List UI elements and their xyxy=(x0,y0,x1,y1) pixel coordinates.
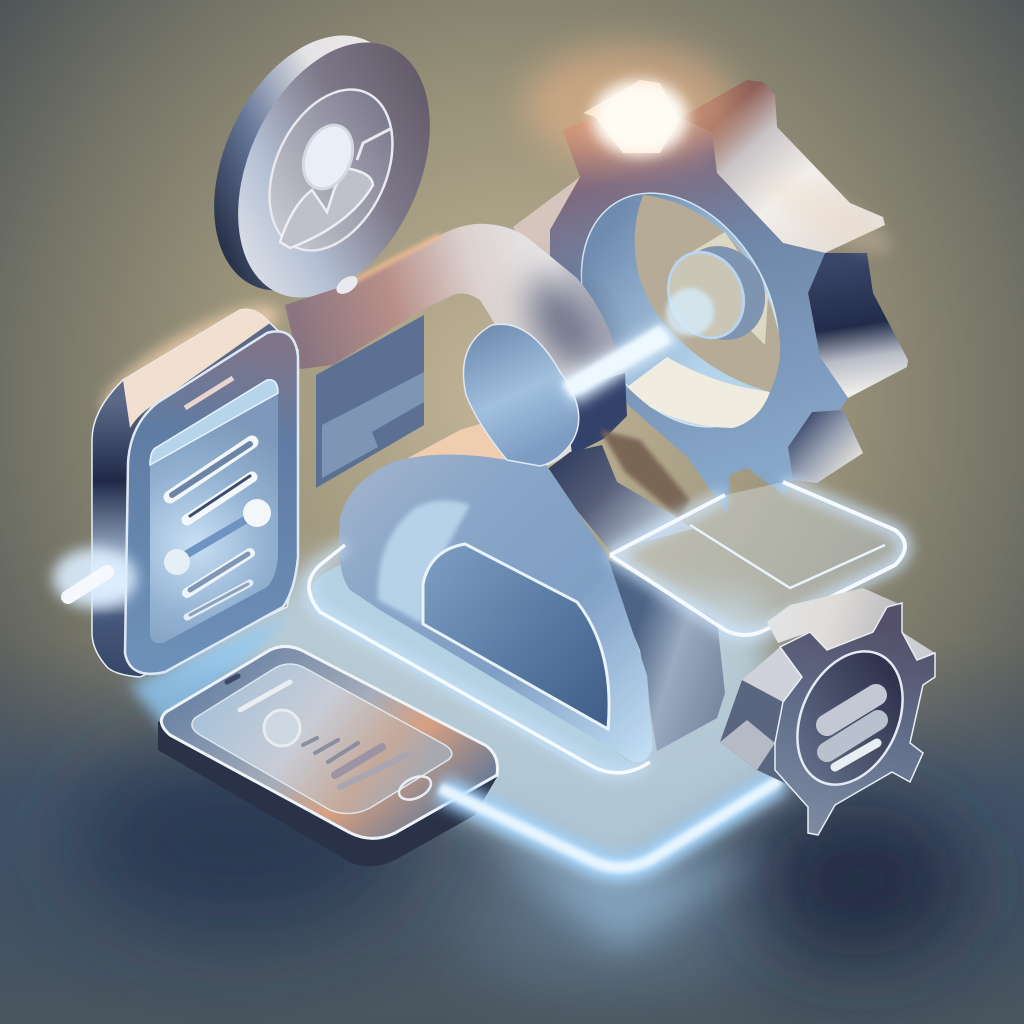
icon: profile disc xyxy=(176,5,468,328)
small gear hub xyxy=(777,634,923,802)
glowing beam xyxy=(560,322,680,405)
highlights xyxy=(525,45,901,267)
glowing outline frame upper right xyxy=(610,482,905,635)
peach light behind shoulder xyxy=(395,415,520,470)
floor glow platform xyxy=(130,560,790,950)
phone list rows xyxy=(170,442,257,617)
figure side xyxy=(600,555,725,751)
phone face xyxy=(125,331,298,674)
large gear xyxy=(513,80,908,513)
phone speaker xyxy=(185,378,233,408)
shadow behind figure xyxy=(600,430,690,518)
rear panel xyxy=(316,315,424,488)
glow connector to small gear xyxy=(440,780,780,868)
gear inner hub xyxy=(664,232,780,354)
figure leg xyxy=(545,445,693,551)
phone screen xyxy=(150,380,278,643)
glowing outline base xyxy=(309,545,650,773)
tablet screen xyxy=(192,664,452,814)
small gear xyxy=(720,588,935,835)
tablet marks xyxy=(227,676,435,804)
figure arch panel xyxy=(423,544,609,729)
light pin xyxy=(53,548,137,608)
tablet device xyxy=(158,646,498,867)
connector pipe xyxy=(285,224,627,467)
left phone card xyxy=(90,287,298,677)
figure head xyxy=(463,324,579,466)
gear hole xyxy=(541,158,819,462)
icon: profile glyph xyxy=(280,118,392,248)
user figure xyxy=(339,324,653,762)
